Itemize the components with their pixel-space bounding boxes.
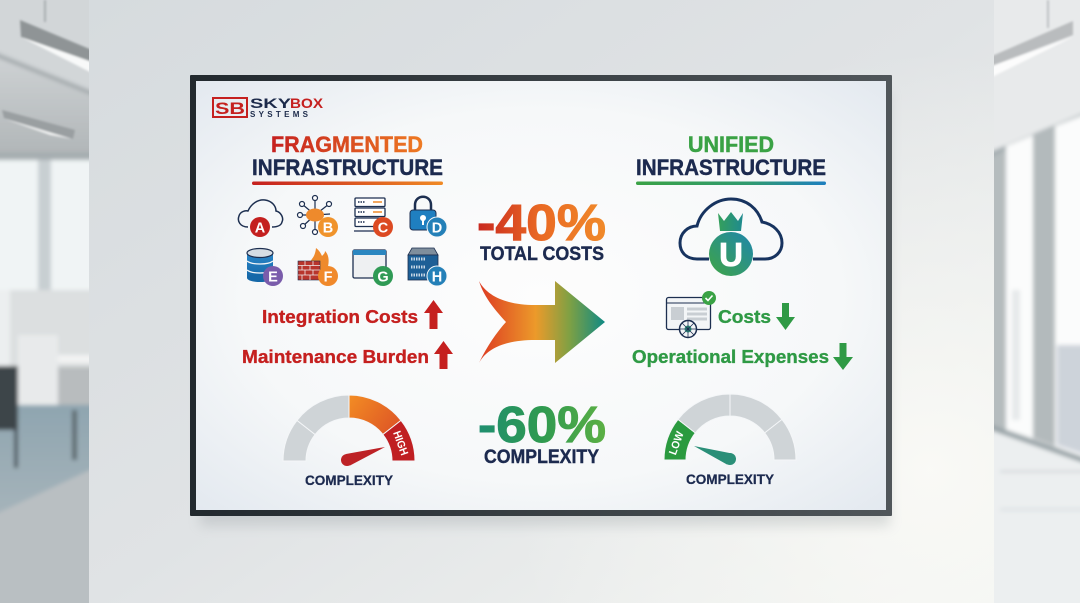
icon: servers C: C (378, 220, 389, 236)
label: total costs: TOTAL COSTS (480, 244, 604, 265)
icon: servers C (354, 198, 393, 237)
label: complexity center: COMPLEXITY (484, 447, 599, 468)
logo: Skybox Systems: SYSTEMS (250, 110, 309, 119)
logo: Skybox Systems: SKY (250, 96, 291, 111)
icon: dashboard window (666, 291, 716, 338)
icon: rack server H: H (432, 270, 442, 286)
icon: rack server H (408, 248, 447, 286)
arrow: integration costs up (424, 300, 443, 329)
gauge needle: low (694, 446, 736, 465)
background: blurred office left (0, 0, 94, 603)
panel: fragmented infrastructure (238, 132, 453, 488)
screen (196, 81, 886, 510)
label: integration costs: Integration Costs (262, 306, 418, 327)
label: costs: Costs (718, 306, 771, 327)
icon: left ceiling lights (2, 0, 92, 139)
label: maintenance burden: Maintenance Burden (242, 346, 429, 367)
monitor shadow (200, 92, 890, 526)
heading underline (636, 182, 826, 185)
arrow: expenses down (833, 343, 853, 370)
heading: unified: UNIFIED (688, 132, 774, 157)
label: complexity right: COMPLEXITY (686, 471, 775, 487)
logo: Skybox Systems (213, 96, 323, 119)
icon: cloud A (238, 200, 283, 237)
heading: infrastructure: INFRASTRUCTURE (252, 155, 443, 180)
icon: right ceiling light (992, 0, 1073, 77)
stat: minus 40 percent: -40% (477, 194, 606, 251)
gauge label: high: HIGH (390, 430, 410, 457)
gauge needle: high (341, 447, 385, 466)
label: operational expenses: Operational Expenses (632, 346, 829, 367)
icon: browser window G: G (377, 270, 389, 286)
label: complexity left: COMPLEXITY (305, 472, 394, 488)
icon: cloud A: A (255, 220, 266, 236)
logo: Skybox Systems: BOX (290, 96, 323, 111)
gauge: low complexity (664, 394, 796, 465)
icon: network hub B (298, 196, 338, 237)
icon: firewall F: F (324, 270, 333, 286)
logo: Skybox Systems: SB (215, 99, 245, 118)
stat: minus 60 percent: -60% (478, 396, 606, 453)
heading: infrastructure: INFRASTRUCTURE (636, 155, 826, 180)
heading underline (252, 182, 443, 185)
icon: padlock D (410, 197, 447, 237)
icon: database E: E (268, 270, 278, 286)
icon: browser window G (353, 250, 393, 286)
heading: fragmented: FRAGMENTED (271, 132, 423, 157)
icon: database E (247, 248, 283, 286)
gauge label: low: LOW (667, 429, 687, 457)
arrow: costs down (776, 303, 795, 330)
panel: unified infrastructure (632, 132, 853, 487)
icon: firewall F (298, 248, 338, 286)
panel: center savings (477, 194, 606, 468)
icon: unified cloud with crown (680, 199, 782, 276)
icon: unified cloud with crown: U (719, 236, 743, 273)
arrow: fragmented to unified (479, 281, 605, 363)
monitor frame (190, 75, 892, 516)
icon: padlock D: D (432, 220, 442, 236)
icon: network hub B: B (323, 220, 333, 236)
gauge: high complexity (283, 395, 415, 466)
background: blurred office right (990, 0, 1080, 603)
arrow: maintenance burden up (434, 341, 453, 369)
